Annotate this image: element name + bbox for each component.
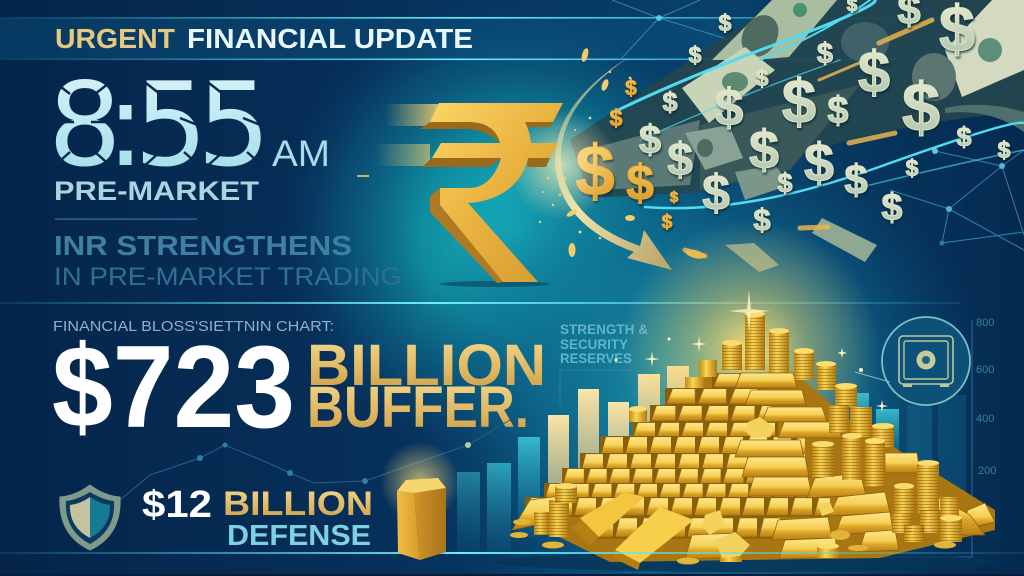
- gold streaks: [685, 20, 932, 256]
- gold pile: [495, 290, 995, 572]
- dollar signs: $: [817, 38, 833, 70]
- clock time: 8:55: [48, 58, 271, 193]
- large end bars: [735, 373, 842, 496]
- chart axis: 600: [976, 364, 994, 376]
- pile glow: [620, 220, 880, 480]
- dollar signs: [575, 0, 1011, 237]
- bottom glow line: [0, 552, 1024, 554]
- dollar signs: $: [702, 165, 730, 221]
- chart axis: [560, 317, 996, 557]
- divider line: [0, 302, 960, 304]
- dollar signs: $: [662, 212, 673, 233]
- gold nuggets: [702, 417, 834, 558]
- dollar signs: $: [719, 10, 732, 36]
- dollar signs: $: [667, 133, 693, 185]
- subheading: pre-market trading: IN PRE-MARKET TRADING: [54, 263, 402, 291]
- dollar signs: $: [956, 122, 972, 152]
- chart axis: 200: [978, 465, 996, 477]
- dollar signs: $: [756, 65, 769, 91]
- dollar signs: $: [998, 137, 1011, 163]
- defense figure: $12: [142, 484, 212, 526]
- top banknote: [712, 0, 837, 60]
- gold bar rows: [525, 373, 842, 539]
- dollar signs: $: [639, 118, 661, 162]
- slanted gold bars: [570, 492, 694, 570]
- strength and security caption: [560, 321, 648, 366]
- standing gold bar: [380, 442, 460, 560]
- second banknote: [682, 47, 775, 123]
- dollar signs: $: [753, 202, 771, 237]
- background line chart: [120, 420, 510, 500]
- AM label: AM: [272, 133, 330, 174]
- financial chart label: FINANCIAL BLOSS'SIETTNIN CHART:: [53, 318, 334, 335]
- dollar signs: $: [777, 168, 793, 198]
- pre-market label: PRE-MARKET: [54, 176, 260, 206]
- dollar signs: $: [715, 79, 744, 137]
- right banknote: [945, 0, 1024, 97]
- gold sparks: [357, 47, 706, 260]
- dollar signs: $: [858, 40, 890, 105]
- dollar signs: $: [827, 90, 849, 132]
- middle banknote: [685, 125, 743, 170]
- dollar signs: $: [689, 42, 702, 68]
- icon: shield: [60, 485, 120, 550]
- rupee symbol: [375, 103, 563, 287]
- defense: billion: BILLION: [223, 485, 373, 523]
- dollar signs: $: [881, 187, 903, 229]
- dollar signs: $: [844, 156, 868, 203]
- dollar signs: $: [749, 120, 779, 180]
- coin stacks: [534, 311, 962, 562]
- dollar signs: $: [906, 155, 919, 181]
- bar chart: [457, 366, 966, 553]
- loose coins: [510, 519, 956, 564]
- dollar signs: $: [670, 189, 679, 206]
- dollar signs: $: [626, 155, 654, 211]
- cyan streaks: [612, 0, 1024, 208]
- chart axis: 800: [976, 317, 994, 329]
- dollar signs: $: [625, 77, 637, 100]
- rupee extrusion: [420, 122, 553, 283]
- sparkles: [614, 290, 888, 412]
- rupee face: [430, 103, 563, 282]
- strength and security caption: RESERVES: [560, 350, 632, 366]
- dollar signs: $: [575, 132, 615, 211]
- strength and security caption: SECURITY: [560, 336, 629, 352]
- strength and security caption: STRENGTH &: [560, 321, 648, 337]
- headline: billion: BILLION: [307, 333, 546, 398]
- subheading: INR strengthens: INR STRENGTHENS: [54, 230, 352, 261]
- dollar signs: $: [662, 87, 678, 117]
- chart axis: 400: [976, 413, 994, 425]
- dollar signs: $: [610, 105, 623, 131]
- icon: vault safe: [855, 317, 970, 405]
- network lines: [612, 0, 1024, 250]
- heading: urgent: URGENT: [55, 23, 175, 54]
- headline figure: $723: [52, 321, 295, 452]
- header band: [0, 17, 1024, 60]
- headline: buffer: BUFFER.: [307, 375, 529, 440]
- heading: financial update: FINANCIAL UPDATE: [187, 23, 473, 54]
- swoosh arrow: [507, 57, 672, 270]
- defense label: DEFENSE: [227, 520, 371, 552]
- dollar signs: $: [782, 68, 816, 137]
- large bars right side: [512, 453, 995, 559]
- dollar signs: $: [804, 133, 834, 193]
- dollar signs: $: [902, 69, 940, 146]
- money stream: [570, 0, 1024, 272]
- small banknotes: [812, 218, 877, 262]
